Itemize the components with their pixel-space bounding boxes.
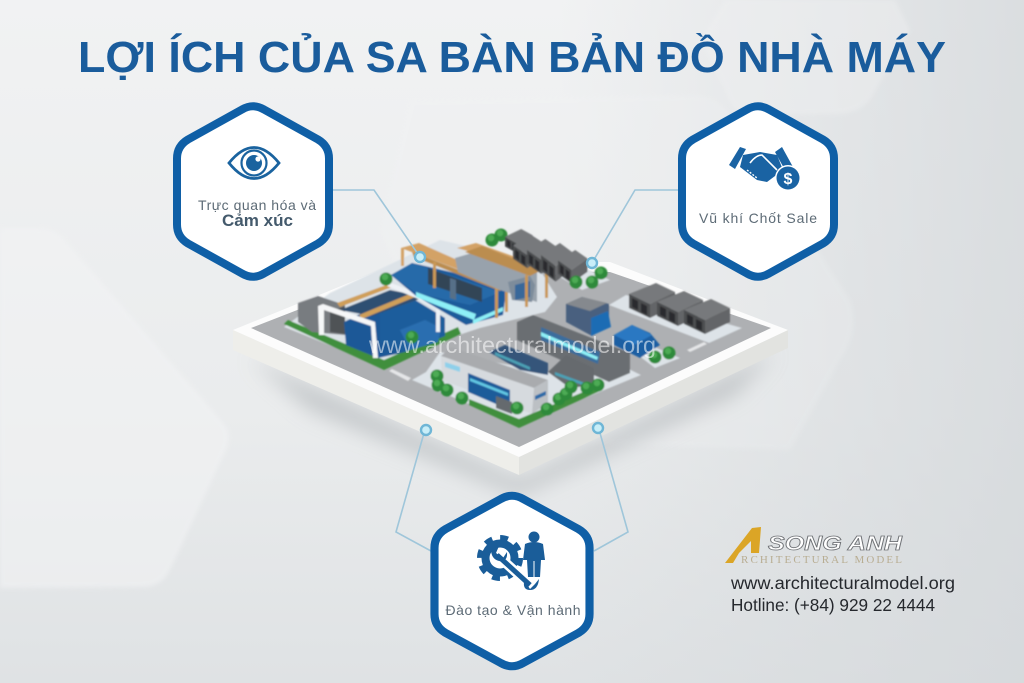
main blue facility	[391, 243, 508, 325]
long dark building	[489, 315, 630, 388]
connector lines	[333, 190, 678, 551]
road markings	[389, 342, 707, 381]
site pads	[284, 240, 742, 425]
icon: handshake and dollar	[729, 147, 801, 191]
warehouse row right	[629, 283, 730, 334]
text: Cảm xúc: Cảm xúc	[222, 211, 293, 230]
platform shadow	[250, 352, 775, 495]
hedges and trees lower	[430, 370, 604, 428]
panel: Vũ khí Chốt Sale	[682, 106, 834, 277]
factory model platform	[233, 228, 788, 495]
text: Vũ khí Chốt Sale: Vũ khí Chốt Sale	[699, 210, 817, 226]
icon: eye	[229, 148, 279, 178]
icon: handshake and dollar: $	[784, 171, 793, 188]
bottom office building	[441, 347, 548, 414]
connector nodes	[415, 252, 603, 435]
gray storage row	[505, 229, 587, 283]
logo: Song Anh	[725, 527, 903, 566]
platform base	[233, 262, 788, 475]
logo mark A	[725, 527, 761, 563]
hotline: Hotline: (+84) 929 22 4444	[731, 595, 935, 615]
icon: gear wrench and worker	[480, 532, 545, 590]
orange frame main	[401, 243, 507, 286]
contact info	[730, 573, 955, 615]
blue machine	[614, 325, 660, 358]
website: www.architecturalmodel.org	[730, 573, 955, 593]
panel: Đào tạo & Vận hành	[434, 496, 590, 666]
text: Trực quan hóa và: Trực quan hóa và	[198, 197, 316, 213]
left hall machinery	[298, 283, 445, 358]
watermark: www.architecturalmodel.org	[368, 332, 656, 358]
trees behind facility	[486, 234, 498, 246]
logo wordmark: SONG ANH	[768, 533, 903, 555]
title: LỢI ÍCH CỦA SA BÀN BẢN ĐỒ NHÀ MÁY	[78, 31, 946, 82]
logo tagline: RCHITECTURAL MODEL	[741, 554, 902, 566]
panel: Trực quan hóa và Cảm xúc	[177, 106, 329, 277]
trees by storage row	[594, 266, 608, 280]
orange frame gray facility	[455, 243, 548, 307]
hedge left	[284, 320, 461, 370]
text: Đào tạo & Vận hành: Đào tạo & Vận hành	[446, 602, 580, 618]
central blue building	[566, 297, 611, 336]
